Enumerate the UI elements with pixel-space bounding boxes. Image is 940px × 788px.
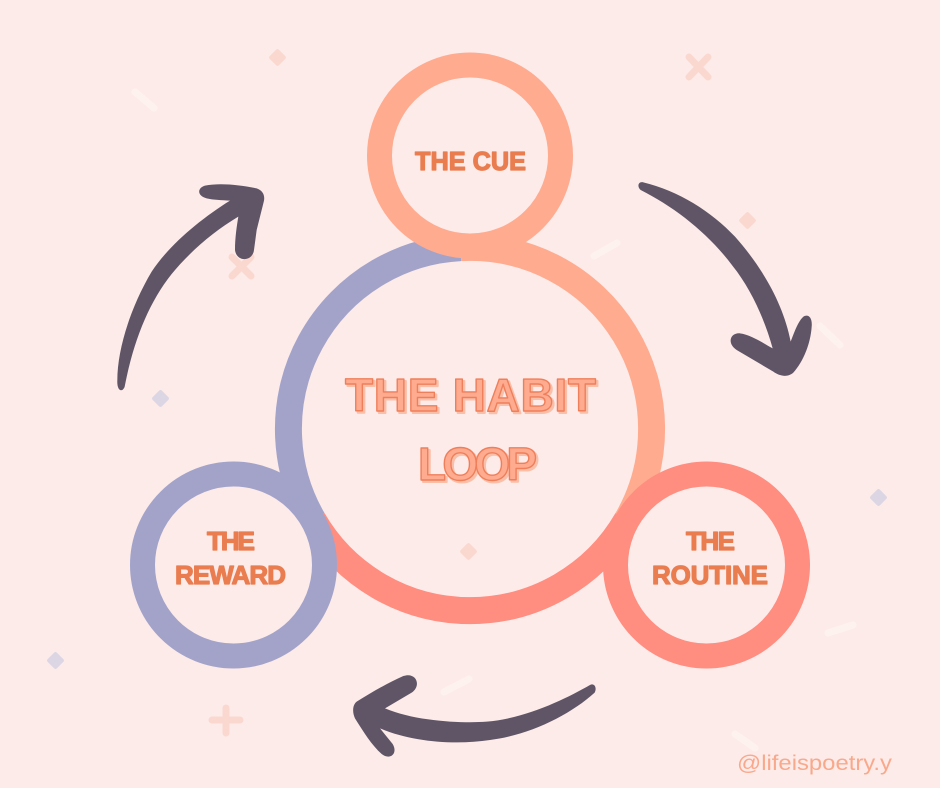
label: the reward: THE xyxy=(207,526,255,556)
title: THE HABIT xyxy=(347,371,598,423)
label: the cue: THE CUE xyxy=(415,146,526,176)
arrow: routine to reward xyxy=(353,675,596,757)
node: the routine xyxy=(616,474,798,656)
node: the reward xyxy=(142,474,324,656)
label: the routine: ROUTINE xyxy=(652,560,768,590)
arrow: reward to cue xyxy=(117,184,264,390)
label: the reward xyxy=(175,526,286,590)
large loop ring xyxy=(288,247,652,611)
arrow: cue to routine xyxy=(638,182,812,376)
ring segment: routine to reward xyxy=(313,520,627,611)
label: the routine: THE xyxy=(686,526,735,556)
ring segment: cue to routine xyxy=(460,247,652,520)
title: THE HABIT xyxy=(345,369,596,421)
node: the cue xyxy=(380,65,560,246)
label: the reward: REWARD xyxy=(175,560,286,590)
ring segment: reward to cue xyxy=(288,248,460,520)
title xyxy=(345,369,598,492)
title: LOOP xyxy=(418,438,537,490)
title: LOOP xyxy=(420,440,539,492)
credit handle: @lifeispoetry.y xyxy=(737,752,893,775)
label: the routine xyxy=(652,526,768,590)
